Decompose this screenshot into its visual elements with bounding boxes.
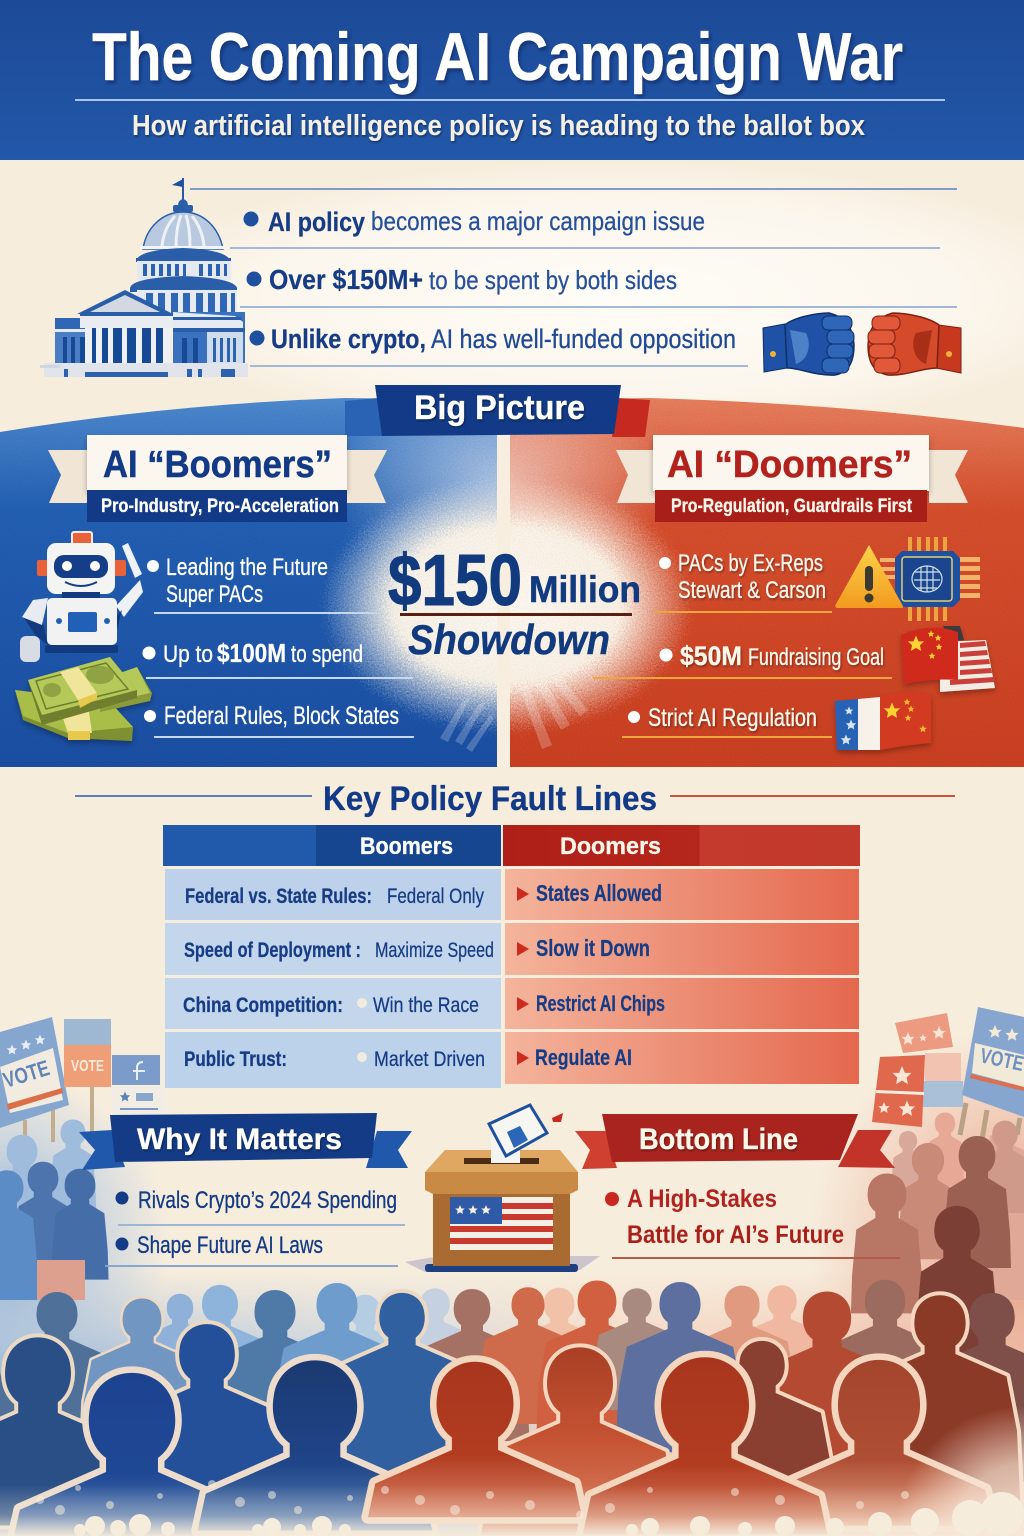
row: public trust	[165, 1032, 859, 1088]
why it matters bullets	[105, 1187, 405, 1267]
sign: vote orange	[64, 1019, 111, 1087]
banner: big picture	[345, 385, 650, 437]
crowd: middle row	[0, 1293, 1020, 1536]
banner: AI Doomers	[616, 435, 968, 522]
sign: star panel	[872, 1055, 925, 1127]
row: speed of deployment: Speed of Deployment :	[184, 939, 361, 962]
box flag	[450, 1197, 553, 1250]
intro bullet lines	[190, 188, 957, 367]
sign: pink and blue card	[923, 1053, 963, 1107]
header band	[0, 0, 1024, 160]
row: china competition: China Competition:	[183, 994, 343, 1017]
row: public trust: Regulate AI	[535, 1045, 632, 1070]
bullet: unlike crypto: Unlike crypto,	[271, 324, 426, 354]
sign: vote blue	[0, 1017, 69, 1128]
row: china competition: Win the Race	[373, 994, 479, 1017]
icon: cash stacks	[15, 657, 152, 741]
item: strict regulation: Strict AI Regulation	[648, 704, 817, 732]
table: policy fault lines	[163, 825, 860, 1088]
center burst	[316, 426, 698, 752]
doomers list	[593, 550, 892, 738]
icon: blue fist	[763, 313, 854, 375]
table header: boomers: Boomers	[360, 833, 453, 860]
item: PACs: PACs by Ex-Reps	[678, 550, 823, 577]
ballot paper	[489, 1105, 563, 1163]
table header: boomers	[163, 825, 501, 866]
row: federal vs state: Federal vs. State Rules:	[185, 885, 372, 908]
bullet: unlike crypto	[250, 324, 736, 354]
icon: red fist	[868, 313, 961, 375]
icon: capitol building	[40, 178, 248, 377]
item: leading the future	[147, 554, 328, 608]
banner: why it matters: Why It Matters	[137, 1123, 342, 1156]
center callout: 150 million showdown: Million	[529, 569, 641, 610]
row: speed of deployment	[165, 923, 859, 975]
why it matters bullets: Rivals Crypto’s 2024 Spending	[138, 1187, 397, 1214]
vote signs: left	[0, 1017, 166, 1145]
banner: AI Boomers	[48, 435, 387, 522]
bullet: over 150M: to be spent by both sides	[429, 265, 677, 295]
panel grain	[0, 398, 1024, 767]
table header: doomers	[503, 825, 860, 866]
icon: robot	[20, 532, 143, 662]
subtitle: How artificial intelligence policy is heading to the ballot box	[132, 110, 865, 142]
banner: AI Doomers: AI “Doomers”	[667, 444, 912, 486]
item: up to 100M	[142, 638, 363, 668]
banner: bottom line	[575, 1114, 895, 1169]
banner: AI Boomers: Pro-Industry, Pro-Acceleration	[101, 496, 339, 517]
sign: vote blue	[962, 1007, 1024, 1117]
row: china competition: Restrict AI Chips	[536, 991, 665, 1016]
row: public trust: Market Driven	[374, 1048, 485, 1071]
item: leading the future: Leading the Future	[166, 554, 328, 581]
bullet: AI policy	[244, 206, 705, 237]
vote signs: right	[872, 1007, 1024, 1140]
icon: china and us flags	[901, 626, 995, 692]
sign: vote blue: VOTE	[0, 1055, 52, 1093]
bullet: over 150M: Over $150M+	[269, 264, 423, 295]
banner: AI Doomers: Pro-Regulation, Guardrails First	[671, 496, 913, 517]
bottom line bullet: Battle for AI’s Future	[627, 1221, 844, 1249]
bullet: unlike crypto: AI has well-funded opposition	[431, 324, 736, 354]
item: PACs: Stewart & Carson	[678, 577, 826, 604]
item: up to 100M: $100M	[217, 638, 286, 668]
bottom line bullet: A High-Stakes	[627, 1185, 777, 1213]
center callout: 150 million showdown	[388, 541, 641, 663]
bottom cream fade	[0, 1406, 1024, 1536]
bullet: AI policy: becomes a major campaign issue	[371, 206, 705, 236]
row: speed of deployment: Maximize Speed	[375, 939, 494, 962]
item: 50M goal	[660, 641, 884, 671]
row: federal vs state: States Allowed	[536, 880, 662, 906]
banner: AI Boomers: AI “Boomers”	[103, 444, 332, 486]
side crowd: right	[851, 1112, 1024, 1370]
row: federal vs state	[165, 869, 859, 920]
table header: doomers: Doomers	[560, 833, 661, 860]
item: up to 100M: Up to	[163, 641, 213, 668]
heading: key policy fault lines: Key Policy Fault Lines	[323, 780, 657, 818]
bottom line bullet	[605, 1185, 900, 1259]
bottom watercolor wash	[0, 1010, 1024, 1536]
icon: ballot box	[405, 1105, 600, 1272]
item: 50M goal: Fundraising Goal	[748, 644, 884, 671]
why it matters bullets: Shape Future AI Laws	[137, 1232, 323, 1259]
panel: doomers background	[510, 398, 1024, 767]
icon: warning and chip	[835, 537, 980, 621]
item: 50M goal: $50M	[680, 641, 742, 671]
center divider strip	[497, 400, 510, 767]
side crowd: left	[0, 1119, 109, 1300]
item: up to 100M: to spend	[291, 641, 363, 668]
banner: why it matters	[79, 1113, 412, 1170]
item: federal rules: Federal Rules, Block States	[164, 702, 399, 730]
row: speed of deployment: Slow it Down	[536, 935, 650, 961]
boomers list	[142, 554, 414, 738]
panel: boomers background	[0, 398, 497, 767]
item: PACs	[659, 550, 826, 604]
bullet: over 150M	[246, 264, 677, 295]
row: china competition	[165, 978, 859, 1029]
sign: vote orange: VOTE	[71, 1058, 104, 1075]
banner: bottom line: Bottom Line	[639, 1123, 798, 1156]
item: leading the future: Super PACs	[166, 581, 263, 608]
row: public trust: Public Trust:	[184, 1048, 287, 1071]
crowd: front row	[14, 1357, 993, 1536]
row: federal vs state: Federal Only	[387, 885, 484, 908]
sign: flag card	[112, 1055, 166, 1117]
crowd: back row	[0, 1280, 1024, 1492]
intro paper highlight	[120, 160, 1024, 410]
banner: big picture: Big Picture	[414, 389, 585, 427]
bullet: AI policy: AI policy	[268, 207, 365, 237]
icon: blue white red flag	[835, 692, 931, 750]
center callout: 150 million showdown: Showdown	[408, 616, 610, 663]
sign: stars top	[895, 1013, 953, 1053]
center callout: 150 million showdown: $150	[388, 541, 522, 621]
